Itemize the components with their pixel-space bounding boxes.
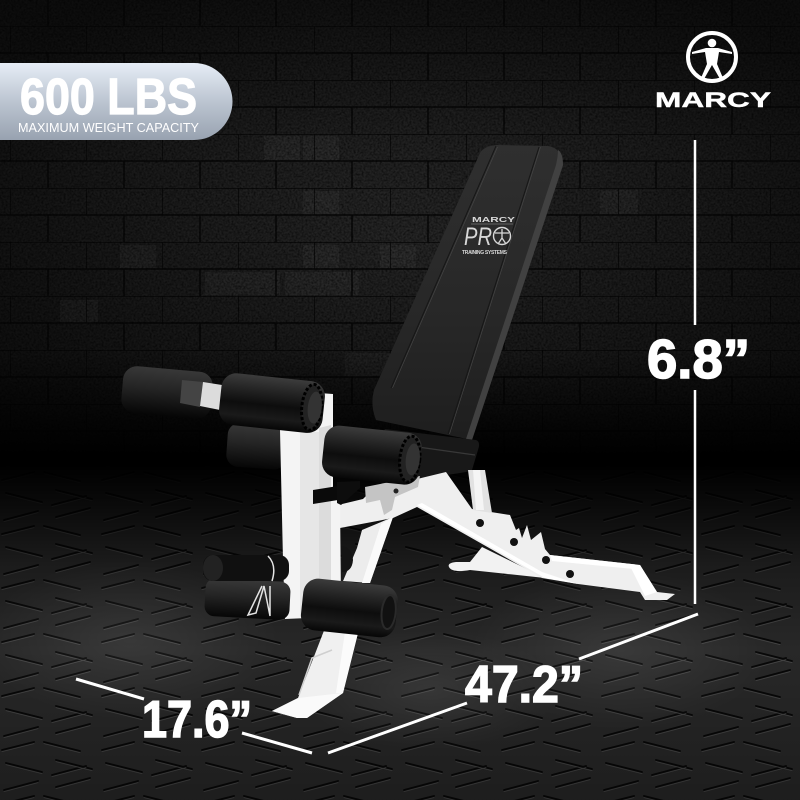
Marcy logo — [655, 33, 771, 112]
bench — [120, 145, 675, 718]
weight capacity badge — [0, 63, 232, 140]
width label: 17.6” — [142, 691, 252, 749]
back pad — [372, 145, 563, 440]
far left roller — [120, 365, 214, 420]
width dimension — [76, 679, 312, 753]
rear diagonal leg — [343, 517, 393, 583]
height line — [694, 140, 696, 604]
length dimension — [328, 614, 698, 753]
small knob — [341, 546, 353, 572]
pad brand mark: TRAINING SYSTEMS — [462, 250, 508, 256]
rear lower roller — [226, 422, 288, 470]
main upright column — [280, 392, 360, 620]
rail pin holes — [476, 519, 574, 578]
pad brand mark: MARCY — [472, 217, 516, 224]
seat pad — [360, 429, 479, 478]
pivot mechanism — [365, 476, 420, 515]
height label: 6.8” — [647, 328, 750, 390]
rear frame rail — [338, 470, 675, 600]
roller connector bracket — [180, 380, 222, 410]
pad brand mark — [462, 217, 516, 256]
width lines — [76, 679, 312, 753]
weight value: 600 LBS — [20, 68, 197, 125]
background: brick wall — [0, 0, 800, 490]
pad brand mark: PR — [464, 223, 492, 251]
logo emblem — [688, 33, 736, 81]
seat front roller — [321, 424, 423, 486]
upper front roller — [218, 372, 326, 434]
spring clip — [248, 556, 274, 616]
front leg and foot — [272, 628, 358, 718]
logo wordmark: MARCY — [655, 89, 771, 112]
weight caption: MAXIMUM WEIGHT CAPACITY — [18, 120, 199, 135]
lower front roller — [299, 577, 399, 639]
background: diamond plate floor — [0, 465, 800, 800]
length label: 47.2” — [465, 656, 583, 714]
upright post — [468, 470, 492, 513]
lower bar and pad — [203, 555, 291, 620]
length lines — [328, 614, 698, 753]
